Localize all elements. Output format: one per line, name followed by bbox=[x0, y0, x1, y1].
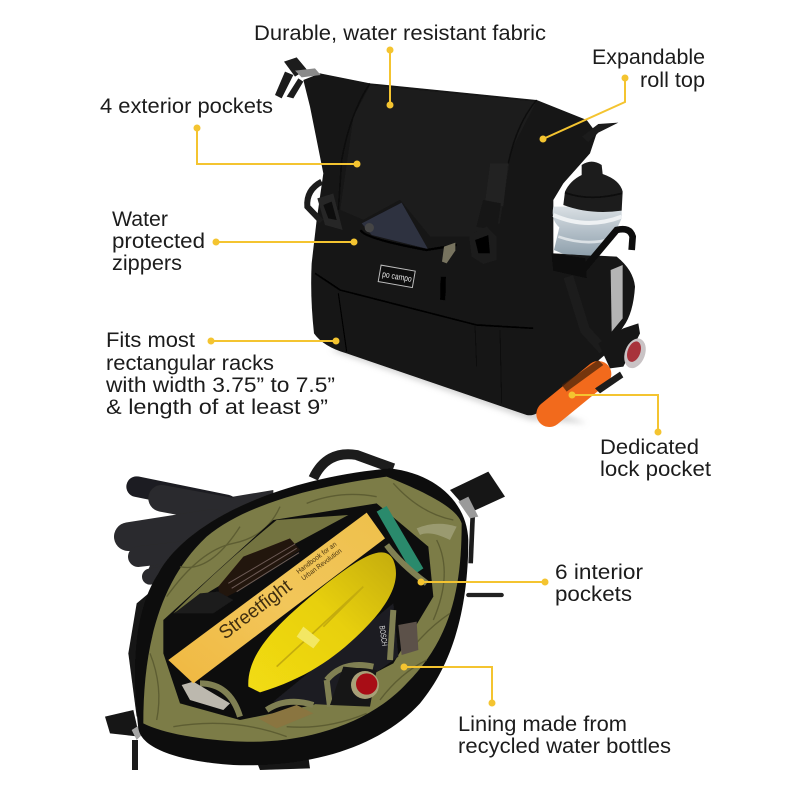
ruffled pockets bbox=[200, 545, 427, 717]
callout: interior pockets bbox=[418, 561, 643, 606]
orange lock bbox=[549, 360, 623, 414]
strap and buckle, right bbox=[485, 163, 508, 207]
water bottle bbox=[553, 162, 623, 256]
book bbox=[168, 513, 385, 683]
left handle and buckle bbox=[307, 182, 322, 222]
spring bbox=[398, 622, 418, 655]
phone in pocket bbox=[362, 203, 428, 249]
bag shadow bbox=[330, 343, 587, 423]
bike light bbox=[598, 323, 650, 371]
photo: closed bag exterior bbox=[275, 57, 650, 423]
callout: expandable roll top bbox=[540, 46, 705, 142]
brand tag: po campo bbox=[381, 269, 413, 284]
callout: exterior pockets bbox=[100, 95, 360, 168]
book title: Handbook for an bbox=[296, 541, 338, 576]
red light bbox=[330, 667, 379, 707]
callout: recycled lining bbox=[400, 664, 671, 758]
callout: rack fit: Fits most bbox=[106, 329, 195, 352]
callout: dedicated lock pocket bbox=[568, 392, 711, 481]
left side panel bbox=[128, 587, 157, 717]
callout: water protected zippers: protected bbox=[112, 230, 205, 253]
callout: durable fabric bbox=[254, 22, 546, 108]
zipper pull, front bbox=[442, 243, 455, 263]
bag body bbox=[303, 73, 635, 415]
photo: open bag interior bbox=[105, 454, 505, 770]
yellow item bbox=[248, 552, 396, 692]
brand tag bbox=[378, 265, 415, 288]
callout: exterior pockets: 4 exterior pockets bbox=[100, 95, 273, 118]
bag outer shell bbox=[135, 468, 468, 765]
straps bbox=[450, 472, 505, 513]
callout: recycled lining: recycled water bottles bbox=[458, 735, 671, 758]
callout: interior pockets: 6 interior bbox=[555, 561, 643, 584]
callout: expandable roll top: roll top bbox=[640, 69, 705, 92]
bottom panel bbox=[315, 273, 537, 413]
notebook bbox=[182, 682, 230, 710]
olive lining bbox=[143, 477, 462, 742]
top flap shading bbox=[340, 85, 537, 237]
right top tab bbox=[582, 123, 618, 143]
gloves bbox=[128, 487, 273, 588]
dark interior cavity bbox=[163, 503, 433, 720]
reflective strip bbox=[611, 265, 623, 332]
wallet bbox=[174, 538, 300, 613]
lining pattern bbox=[150, 483, 453, 737]
callout: durable fabric: Durable, water resistant fabric bbox=[254, 22, 546, 45]
callout: rack fit: & length of at least 9” bbox=[106, 396, 328, 419]
handle bbox=[313, 454, 393, 478]
book title: Streetfight bbox=[215, 576, 296, 644]
callout: water protected zippers: Water bbox=[112, 208, 168, 231]
callout: recycled lining: Lining made from bbox=[458, 713, 627, 736]
book title: Urban Revolution bbox=[301, 548, 343, 582]
callout: rack fit: rectangular racks bbox=[106, 352, 274, 375]
side strap bbox=[582, 229, 633, 272]
callout: rack fit: with width 3.75” to 7.5” bbox=[105, 374, 335, 397]
pouch label: BOSCH bbox=[377, 625, 389, 647]
zipper pulls bbox=[471, 517, 473, 563]
green pack bbox=[377, 506, 423, 575]
callout: dedicated lock pocket: Dedicated bbox=[600, 436, 699, 459]
callout: water protected zippers: zippers bbox=[112, 252, 182, 275]
black pouch bbox=[273, 603, 398, 705]
callout: expandable roll top: Expandable bbox=[592, 46, 705, 69]
pocket zipper bbox=[361, 230, 457, 250]
book title bbox=[215, 539, 345, 644]
callout: interior pockets: pockets bbox=[555, 583, 632, 606]
callout: water protected zippers bbox=[112, 208, 358, 275]
zipper pulls bbox=[284, 57, 307, 77]
callout: rack fit bbox=[105, 329, 340, 419]
callout: dedicated lock pocket: lock pocket bbox=[600, 458, 711, 481]
brass item bbox=[258, 705, 313, 728]
